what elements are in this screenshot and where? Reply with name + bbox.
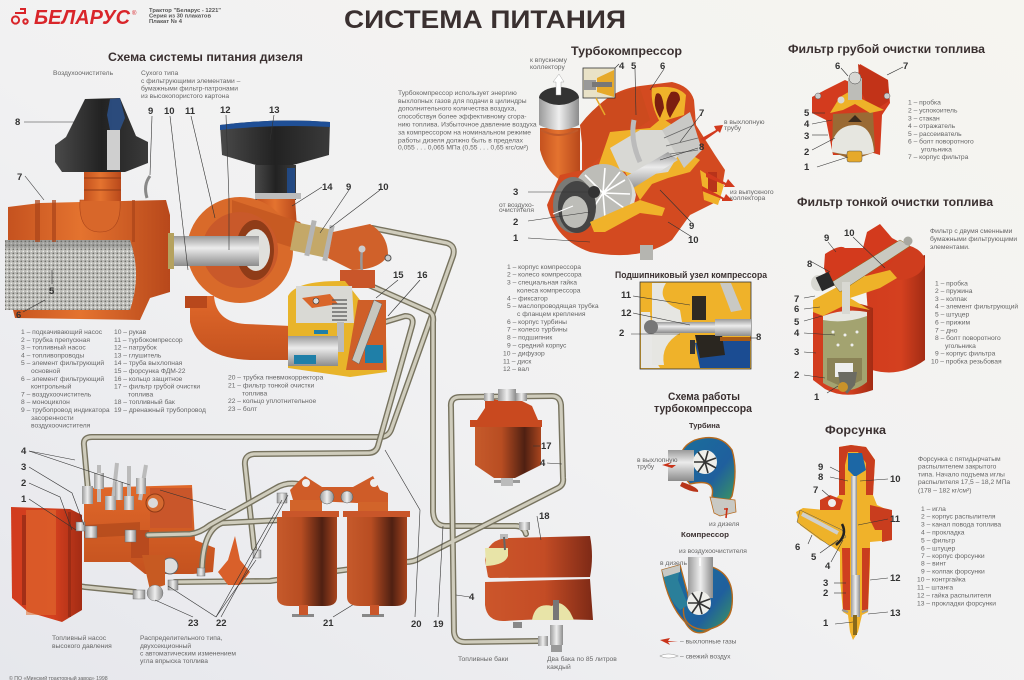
legend: coarse filter: угольника [921, 147, 952, 154]
legend: turbo parts: 5 – маслопроводящая трубка [507, 302, 599, 310]
fittings [76, 493, 287, 601]
part numbers: 8 [756, 332, 761, 343]
gear housing [11, 507, 82, 622]
bearing section [640, 282, 751, 369]
notes: flow labels: очистителя [499, 207, 534, 214]
part numbers: 1 [804, 162, 810, 173]
leader lines [29, 450, 443, 617]
legend: turbo parts: с фланцем крепления [517, 311, 586, 318]
legend: parts column 2: 15 – форсунка ФДМ-22 [114, 368, 186, 375]
notes: flow labels: трубу [724, 124, 742, 132]
part numbers: 12 [220, 105, 231, 116]
legend: turbo parts: 4 – фиксатор [507, 295, 548, 302]
engine cylinder section [288, 281, 387, 377]
part numbers: 5 [49, 286, 55, 297]
legend: parts column 2: 13 – глушитель [114, 352, 162, 359]
brand name: БЕЛАРУС [34, 7, 131, 29]
leader lines [804, 237, 885, 393]
legend: parts column 1: засоренности [31, 415, 74, 422]
part numbers: 4 [21, 446, 27, 457]
legend: coarse filter: 3 – стакан [908, 116, 940, 122]
part numbers [795, 462, 901, 629]
caption: distributor type: с автоматическим изменением [140, 651, 236, 658]
logo: Belarus [12, 7, 137, 29]
legend: parts column 2: 19 – дренажный трубопровод [114, 406, 206, 414]
legend: turbo parts: 10 – дифузор [503, 350, 545, 357]
leader lines [23, 115, 420, 316]
part numbers: 13 [269, 105, 280, 116]
part numbers: 22 [216, 618, 227, 629]
part numbers: 7 [794, 294, 799, 305]
legend: parts column 3 [228, 374, 324, 413]
text: description: выхлопных газов для подачи в цилиндры [398, 98, 527, 105]
notes: flow labels: к впускному [530, 57, 568, 64]
legend: turbo parts: колеса компрессора [517, 287, 581, 294]
notes: turbine: трубу [637, 462, 655, 470]
panel: coarse fuel filter [788, 42, 985, 173]
legend: fine filter: 9 – корпус фильтра [935, 351, 996, 358]
legend: fine filter: 8 – болт поворотного [935, 334, 1001, 342]
legend: coarse filter: 7 – корпус фильтра [908, 154, 969, 161]
notes: flow labels: от воздухо- [499, 202, 534, 209]
legend: coarse filter: 2 – успокоитель [908, 108, 958, 114]
part numbers: 2 [804, 147, 809, 158]
part numbers: 17 [541, 441, 552, 452]
legend: parts column 2: 14 – труба выхлопная [114, 359, 183, 367]
part numbers: 1 [513, 233, 519, 244]
part numbers [804, 61, 908, 173]
heading: coarse filter: Фильтр грубой очистки топлива [788, 42, 985, 56]
filter cutaway [811, 224, 925, 395]
legend: fine filter: 7 – дно [935, 327, 958, 334]
part numbers: 8 [15, 117, 20, 128]
caption: distributor type [140, 635, 236, 665]
legend: parts column 1: 4 – топливопроводы [21, 352, 84, 359]
legend: fine filter: 2 – пружина [935, 288, 973, 295]
legend: fine filter: 4 – элемент фильтрующий [935, 303, 1018, 311]
leader lines [812, 67, 903, 167]
legend: parts column 1: 6 – элемент фильтрующий [21, 375, 104, 383]
legend: injector: 6 – штуцер [921, 545, 955, 552]
part numbers: 11 [890, 514, 901, 525]
panel: injector [795, 423, 1010, 640]
caption: distributor type: двухсекционный [140, 642, 191, 650]
heading: scheme: Схема системы питания дизеля [108, 50, 303, 64]
part numbers: 14 [322, 182, 333, 193]
legend: coarse filter: 5 – рассеиватель [908, 131, 962, 138]
legend: fine filter: 5 – штуцер [935, 312, 969, 319]
leader lines [631, 296, 756, 338]
poster info [149, 8, 221, 25]
text: description [398, 89, 537, 152]
notes: flow labels: из выпускного [730, 189, 774, 196]
part numbers [794, 228, 855, 403]
caption: pump: Топливный насос [52, 634, 107, 642]
legend: parts column 2: 17 – фильтр грубой очистки [114, 383, 200, 391]
legend: parts column 1: 9 – трубопровод индикатора [21, 406, 110, 414]
legend: turbo parts: 1 – корпус компрессора [507, 264, 581, 271]
part numbers: 6 [795, 542, 800, 553]
text: description: Турбокомпрессор использует энергию [398, 89, 517, 97]
part numbers: 5 [794, 317, 800, 328]
note: air cleaner: Воздухоочиститель [53, 70, 114, 77]
legend: parts column 1 [21, 328, 110, 430]
part numbers: 5 [804, 108, 810, 119]
part numbers: 5 [631, 61, 637, 72]
arrows: gas flow [700, 125, 735, 201]
legend: flows: – выхлопные газы [680, 638, 737, 646]
caption: tanks: Два бака по 85 литров [547, 655, 617, 663]
legend: flows [660, 638, 737, 660]
part numbers: 20 [411, 619, 422, 630]
part numbers: 10 [844, 228, 855, 239]
part numbers: 12 [890, 573, 901, 584]
legend: parts column 3: 23 – болт [228, 405, 257, 413]
legend: injector: 3 – канал повода топлива [921, 522, 1001, 529]
legend: parts column 1: 1 – подкачивающий насос [21, 328, 103, 336]
filter cutaway [812, 64, 890, 162]
notes: compressor: из воздухоочистителя [679, 548, 747, 555]
part numbers: 21 [323, 618, 334, 629]
poster info: Серия из 30 плакатов [149, 14, 211, 20]
part numbers: 4 [540, 458, 546, 469]
part numbers: 8 [807, 259, 812, 270]
part numbers: 9 [346, 182, 351, 193]
text: description: работы дизеля должно быть в пределах [398, 136, 524, 144]
text: description: бумажными фильтрующими [930, 235, 1017, 243]
part numbers: 12 [621, 308, 632, 319]
part numbers: 23 [188, 618, 199, 629]
legend: fine filter [931, 279, 1018, 365]
caption: tanks: каждый [547, 663, 571, 671]
part numbers: 4 [804, 119, 810, 130]
part numbers: 2 [619, 328, 624, 339]
legend: turbo parts: 3 – специальная гайка [507, 279, 577, 287]
legend: turbo parts: 8 – подшипник [507, 335, 552, 342]
legend: injector: 4 – прокладка [921, 529, 965, 536]
legend: parts column 2: 16 – кольцо защитное [114, 376, 183, 383]
part numbers: 3 [513, 187, 518, 198]
legend: parts column 2: 10 – рукав [114, 329, 147, 336]
leader lines [528, 64, 702, 242]
legend: fine filter: угольника [945, 343, 976, 350]
part numbers: 15 [393, 270, 404, 281]
notes: flow labels: коллектора [730, 195, 766, 202]
inset: fixator [583, 68, 615, 115]
panel: diesel fuel system scheme [5, 50, 428, 430]
legend: parts column 1: 8 – моноциклон [21, 399, 70, 406]
legend: injector: 9 – колпак форсунки [921, 569, 985, 576]
heading: turbine: Турбина [689, 421, 721, 430]
part numbers: 8 [699, 142, 704, 153]
part numbers [513, 61, 704, 246]
legend: turbo parts: 11 – диск [503, 358, 531, 365]
heading: fine filter: Фильтр тонкой очистки топлива [797, 195, 993, 209]
heading: operation scheme [654, 391, 753, 415]
panel: fine fuel filter [794, 195, 1018, 403]
part numbers: 6 [835, 61, 840, 72]
leader lines [808, 467, 888, 624]
panel: turbocharger operation scheme [637, 391, 753, 660]
legend: parts column 2 [114, 329, 206, 414]
legend: turbo parts: 9 – средний корпус [507, 341, 567, 349]
part numbers: 4 [469, 592, 475, 603]
pump to filter pipes [148, 484, 312, 570]
filter right [347, 517, 407, 606]
part numbers: 9 [148, 106, 153, 117]
legend: coarse filter [908, 98, 974, 161]
diaphragm unit [218, 536, 250, 585]
legend: parts column 2: 11 – турбокомпрессор [114, 336, 183, 344]
text: description: (178 – 182 кг/см²) [918, 487, 971, 494]
heading: operation scheme: Схема работы [668, 391, 740, 403]
text: description: 0,055 . . . 0,065 МПа (0,55 . . . 0,65 кгс/см²) [398, 145, 528, 152]
legend: injector: 13 – прокладки форсунки [917, 600, 996, 607]
monocyclone [55, 98, 148, 172]
note: dry type: с фильтрующими элементами – [141, 78, 241, 85]
caption: tanks [458, 655, 617, 671]
part numbers: 2 [794, 370, 799, 381]
part numbers: 19 [433, 619, 444, 630]
notes: turbine: из дизеля [709, 521, 740, 528]
leader lines [456, 446, 562, 597]
legend: turbo parts: 6 – корпус турбины [507, 318, 567, 326]
part numbers: 7 [903, 61, 908, 72]
heading: compressor: Компрессор [681, 530, 729, 539]
legend: turbo parts: 12 – вал [503, 366, 529, 373]
air cleaner [5, 170, 170, 320]
caption: pump [52, 634, 112, 650]
part numbers: 9 [689, 221, 694, 232]
legend: injector: 7 – корпус форсунки [921, 553, 985, 560]
caption: pump: высокого давления [52, 643, 112, 650]
part numbers: 10 [890, 474, 901, 485]
legend: parts column 3: 21 – фильтр тонкой очистки [228, 382, 314, 390]
legend: turbo parts: 7 – колесо турбины [507, 326, 568, 334]
text: description: способствуя более эффективному сгора- [398, 112, 527, 120]
legend: fine filter: 6 – прижим [935, 319, 970, 326]
legend: parts column 1: 3 – топливный насос [21, 344, 86, 352]
part numbers: 2 [21, 478, 26, 489]
legend: injector [917, 506, 1001, 607]
notes: turbine: в выхлопную [637, 457, 677, 464]
legend: coarse filter: 1 – пробка [908, 98, 941, 106]
legend: injector: 8 – винт [921, 561, 946, 568]
icon: tractor [12, 9, 28, 24]
part numbers: 7 [699, 108, 704, 119]
pump body [84, 485, 215, 574]
note: dry type: Сухого типа [141, 70, 178, 77]
panel: fine filters [277, 476, 410, 617]
logo: Belarus: ® [132, 10, 137, 17]
part numbers: 8 [818, 472, 823, 483]
part numbers: 2 [513, 217, 518, 228]
poster info: Трактор "Беларус - 1221" [149, 8, 221, 14]
part numbers: 7 [17, 172, 22, 183]
notes: flow labels [499, 57, 774, 214]
note: dry type [141, 70, 241, 100]
part numbers: 3 [823, 578, 828, 589]
part numbers: 10 [688, 235, 699, 246]
legend: flows: – свежий воздух [680, 652, 731, 660]
part numbers: 11 [621, 290, 632, 301]
text: description: Фильтр с двумя сменными [930, 228, 1013, 235]
caption: tanks: Топливные баки [458, 655, 508, 663]
text: description: распылителем закрытого [918, 464, 997, 471]
legend: parts column 2: 18 – топливный бак [114, 398, 175, 406]
text: description: дополнительного количества воздуха, [398, 106, 516, 113]
fuel tank lower [485, 579, 593, 652]
title: СИСТЕМА ПИТАНИЯ [344, 6, 626, 34]
legend: injector: 2 – корпус распылителя [921, 514, 996, 521]
text: description: нию топлива. Избыточное давление воздуха [398, 120, 537, 128]
injector cutaway [796, 445, 892, 640]
part numbers: 6 [660, 61, 665, 72]
coarse fuel filter [470, 389, 542, 486]
legend: fine filter: 10 – пробка резьбовая [931, 357, 1002, 365]
legend: parts column 1: контрольный [31, 383, 72, 391]
notes: compressor [660, 548, 747, 567]
legend: turbo parts [503, 264, 599, 373]
part numbers: 4 [619, 61, 625, 72]
legend: injector: 10 – контргайка [917, 576, 966, 584]
legend: turbo parts: 2 – колесо компрессора [507, 272, 582, 279]
part numbers: 1 [823, 618, 829, 629]
legend: parts column 2: 12 – патрубок [114, 344, 157, 352]
note: dry type: бумажными фильтр-патронами [141, 84, 238, 92]
legend: coarse filter: 4 – отражатель [908, 123, 956, 130]
legend: injector: 12 – гайка распылителя [917, 591, 992, 599]
legend: parts column 3: топлива [242, 390, 267, 397]
part numbers: 1 [21, 494, 27, 505]
part numbers [21, 446, 444, 630]
injection outlet tubes [82, 463, 146, 510]
legend: parts column 1: основной [31, 367, 60, 375]
legend: coarse filter: 6 – болт поворотного [908, 138, 974, 146]
diagram: turbine [662, 438, 736, 518]
legend: parts column 1: 2 – трубка препускная [21, 336, 90, 344]
part numbers: 3 [794, 347, 799, 358]
panel: coarse filter and tanks [456, 389, 617, 671]
part numbers [15, 105, 428, 321]
caption: distributor type: угла впрыска топлива [140, 658, 208, 665]
panel: bearing unit [615, 270, 768, 369]
part numbers [469, 441, 552, 603]
panel: turbocompressor [398, 44, 774, 373]
part numbers: 9 [818, 462, 823, 473]
diagram: compressor [662, 557, 732, 633]
part numbers: 10 [164, 106, 175, 117]
text: description [930, 228, 1017, 251]
legend: fine filter: 1 – пробка [935, 279, 968, 287]
part numbers: 6 [794, 304, 799, 315]
notes: flow labels: коллектору [530, 64, 565, 71]
part numbers: 2 [823, 588, 828, 599]
notes: flow labels: в выхлопную [724, 119, 764, 126]
caption: distributor type: Распределительного типа, [140, 635, 223, 642]
panel: high pressure fuel pump [11, 446, 444, 665]
legend: injector: 11 – штанга [917, 585, 953, 592]
text: description [918, 456, 1010, 494]
text: description: распылителя 17,5 – 18,2 МПа [918, 479, 1010, 486]
text: description: элементами. [930, 244, 970, 251]
turbocompressor [168, 197, 391, 360]
legend: parts column 3: 22 – кольцо уплотнительное [228, 398, 316, 405]
muffler [220, 121, 330, 227]
part numbers: 1 [814, 392, 820, 403]
part numbers [619, 290, 761, 343]
part numbers: 7 [813, 485, 818, 496]
part numbers: 3 [21, 462, 26, 473]
part numbers: 6 [16, 310, 21, 321]
legend: parts column 1: 5 – элемент фильтрующий [21, 359, 104, 367]
part numbers: 18 [539, 511, 550, 522]
legend: fine filter: 3 – колпак [935, 296, 967, 303]
legend: parts column 2: топлива [128, 391, 153, 398]
fuel tank upper [485, 522, 592, 578]
part numbers: 4 [825, 561, 831, 572]
poster info: Плакат № 4 [149, 19, 183, 25]
heading: injector: Форсунка [825, 423, 886, 437]
heading: turbocompressor: Турбокомпрессор [571, 44, 682, 58]
heading: bearing unit: Подшипниковый узел компрессора [615, 270, 768, 281]
part numbers: 9 [824, 233, 829, 244]
text: description: типа. Начало подъема иглы [918, 471, 1005, 478]
turbo cutaway [539, 74, 725, 260]
part numbers: 16 [417, 270, 428, 281]
legend: parts column 1: воздухоочистителя [31, 423, 91, 430]
heading: operation scheme: турбокомпрессора [654, 403, 753, 415]
part numbers: 5 [811, 552, 817, 563]
legend: parts column 1: 7 – воздухоочиститель [21, 391, 92, 398]
note: dry type: из высокопористого картона [141, 93, 229, 100]
filter left [277, 517, 337, 606]
part numbers: 11 [185, 106, 196, 117]
part numbers: 13 [890, 608, 901, 619]
text: description: Форсунка с пятидырчатым [918, 456, 1001, 463]
part numbers: 3 [804, 131, 809, 142]
notes: turbine [637, 457, 740, 528]
part numbers: 10 [378, 182, 389, 193]
part numbers: 4 [794, 328, 800, 339]
filter head [290, 476, 388, 503]
legend: injector: 5 – фильтр [921, 538, 955, 545]
legend: parts column 3: 20 – трубка пневмокорректора [228, 374, 324, 382]
legend: injector: 1 – игла [921, 506, 946, 513]
text: description: за компрессором на номинальном режиме [398, 129, 531, 136]
fuel pipes [47, 228, 563, 642]
notes: compressor: в дизель [660, 560, 687, 567]
